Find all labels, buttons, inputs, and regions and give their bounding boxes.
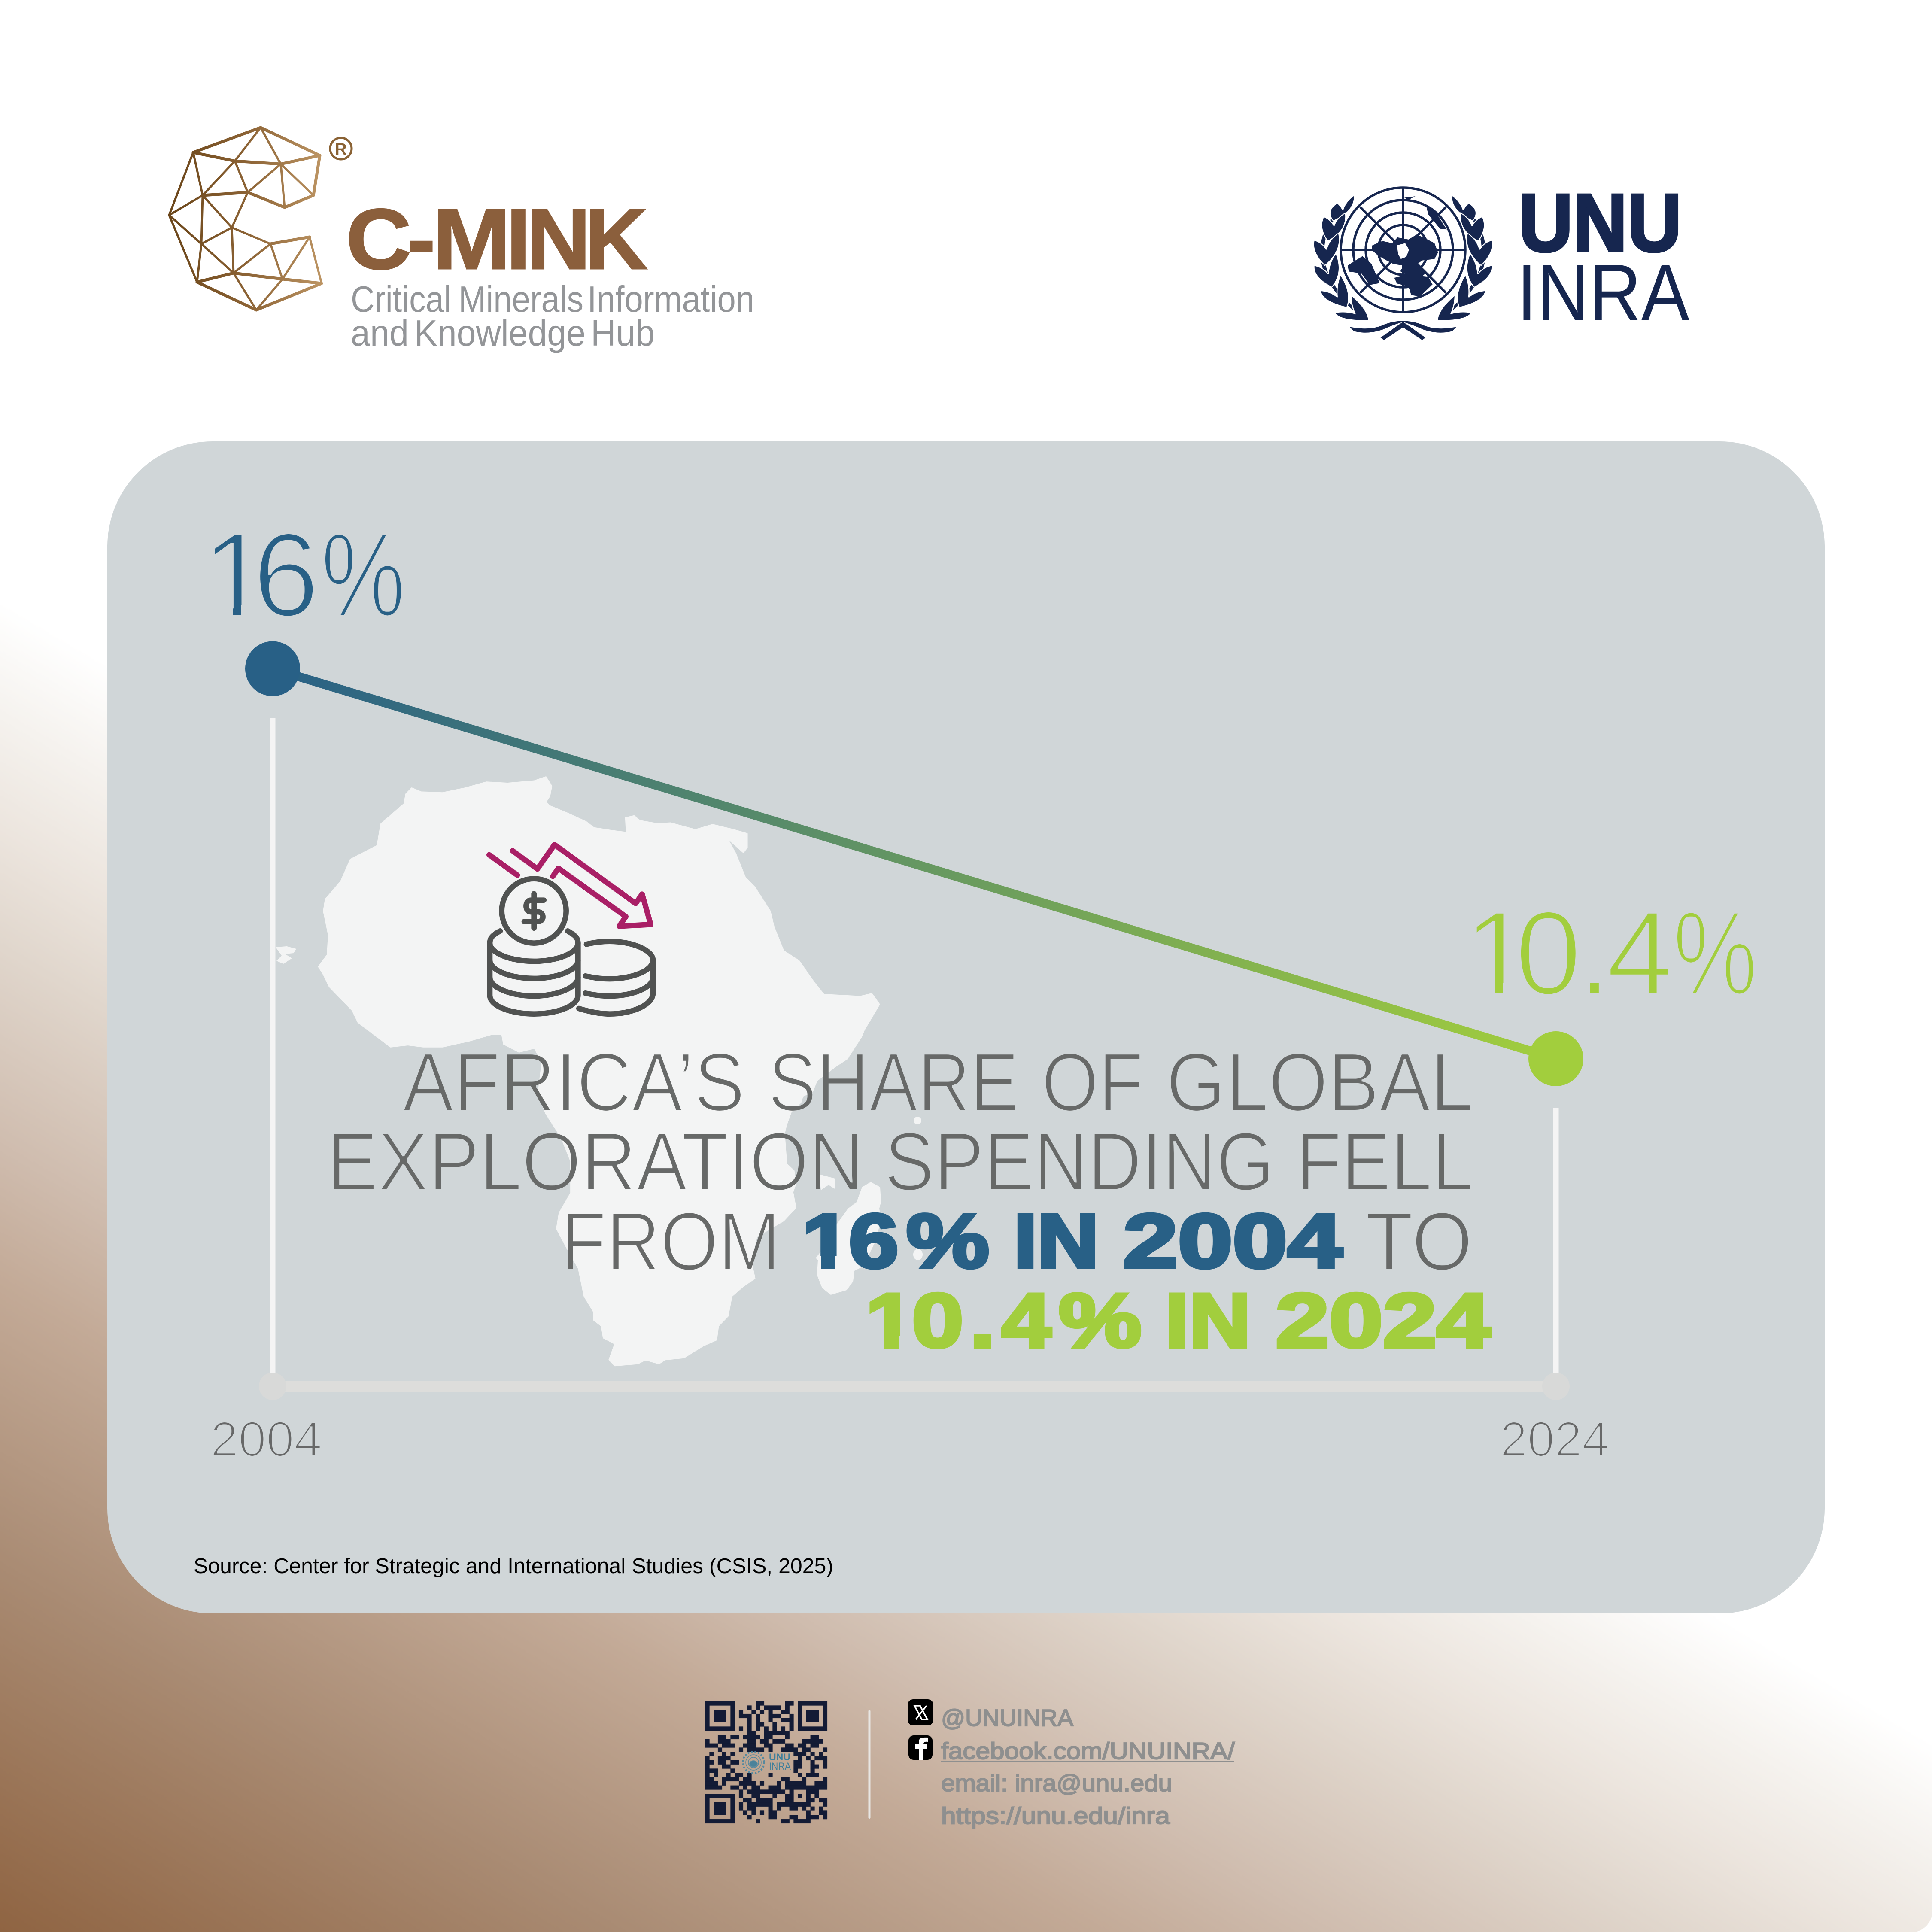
value label: 10.4%	[1477, 912, 1753, 994]
tagline: Hub	[591, 313, 655, 354]
contact details	[941, 1704, 1235, 1829]
data point: 2024	[1528, 1031, 1583, 1086]
wordmark: C-MINK: N	[526, 191, 591, 287]
axis: left end marker	[259, 1373, 286, 1400]
tagline	[351, 279, 754, 354]
headline line 4: 10.4% in 2024: 4	[1002, 1278, 1051, 1363]
contact: website: https://unu.edu/inra	[941, 1802, 1170, 1829]
value label: 16%: %	[321, 508, 406, 641]
chart: declining trend line	[273, 669, 1556, 1059]
headline line 2: EXPLORATION	[327, 1115, 864, 1208]
QR centre logo: INRA: INRA	[769, 1761, 791, 1772]
data point: 2004	[245, 641, 300, 696]
headline line 3: 16% in 2004: %	[906, 1198, 989, 1284]
coins	[490, 879, 653, 1014]
value label: 16%: 6	[253, 508, 319, 641]
tagline: and	[351, 313, 409, 354]
icon: X	[908, 1699, 933, 1725]
headline line 2: FELL	[1296, 1115, 1473, 1208]
tagline: Critical	[351, 279, 451, 320]
headline line 4: 10.4% in 2024: 1	[866, 1278, 914, 1363]
logo: UNU-INRA	[1314, 177, 1689, 340]
headline line 3: 16% in 2004: 2004	[1123, 1198, 1342, 1284]
icon: falling coins	[489, 844, 653, 1014]
headline line 3: 16% in 2004: IN	[1014, 1198, 1099, 1284]
wordmark: INRA: INRA	[1517, 248, 1689, 337]
tagline: Knowledge	[414, 313, 586, 354]
contact: Facebook: facebook.com/UNUINRA/	[941, 1738, 1235, 1764]
source note: Source: Center for Strategic and International Studies (CSIS, 2025)	[194, 1555, 833, 1578]
year label: 2024: 2024	[1500, 1411, 1609, 1467]
axis: horizontal baseline	[279, 1381, 1546, 1392]
registered trademark mark	[330, 138, 352, 159]
headline line 3: 16% in 2004: 6	[849, 1198, 899, 1284]
headline line 1: GLOBAL	[1166, 1036, 1473, 1128]
contact: X handle: @UNUINRA	[941, 1704, 1073, 1731]
icon: C-MINK crystal mesh	[169, 128, 322, 310]
panel: chart card	[107, 441, 1825, 1613]
headline line 4: 10.4% in 2024: .	[969, 1278, 996, 1363]
wordmark: C-MINK: C	[346, 191, 411, 287]
QR modules	[705, 1701, 827, 1823]
value label: 10.4%: .	[1578, 886, 1611, 1020]
headline line 2: SPENDING	[884, 1115, 1274, 1208]
value label: 16%: 1	[202, 508, 269, 641]
headline line 4: 10.4% in 2024: IN	[1165, 1278, 1251, 1363]
tagline: Information	[587, 279, 754, 320]
headline line 3: from: FROM	[561, 1195, 781, 1288]
headline line 4: 10.4% in 2024: %	[1059, 1278, 1142, 1363]
headline	[334, 1054, 1492, 1349]
value label: 10.4%: 4	[1607, 886, 1673, 1020]
contact: Facebook underline	[941, 1761, 1234, 1762]
value label: 10.4%: 1	[1464, 886, 1531, 1020]
laurel branches	[1314, 195, 1492, 340]
continents	[1348, 196, 1447, 297]
axis: left vertical guide	[270, 718, 276, 1375]
QR code	[705, 1701, 827, 1823]
down arrow	[489, 844, 651, 926]
year label: 2004: 2004	[210, 1411, 322, 1467]
wordmark: C-MINK: -	[407, 191, 435, 287]
wordmark: C-MINK: M	[432, 191, 511, 287]
headline line 3: to: TO	[1365, 1195, 1473, 1288]
headline line 4: 10.4% in 2024	[866, 1278, 1490, 1363]
headline line 4: 10.4% in 2024: 2024	[1276, 1278, 1490, 1363]
QR centre logo emblem	[743, 1752, 764, 1773]
tagline: Minerals	[459, 279, 583, 320]
globe grid	[1341, 188, 1465, 312]
headline line 1: AFRICA’S	[403, 1036, 745, 1128]
map: Africa silhouette	[276, 777, 923, 1366]
headline line 3: 16% in 2004: 1	[802, 1198, 851, 1284]
value label: 16%	[215, 534, 401, 616]
registered trademark mark: R	[335, 140, 347, 158]
contact: email: email: inra@unu.edu	[941, 1770, 1172, 1796]
value label: 10.4%: 0	[1515, 886, 1582, 1020]
icon: Facebook	[908, 1735, 933, 1760]
axis: right vertical guide	[1553, 1108, 1558, 1375]
headline line 1: OF	[1042, 1036, 1143, 1128]
headline line 1: SHARE	[768, 1036, 1019, 1128]
headline line 3: 16% in 2004	[806, 1212, 1344, 1270]
footer divider	[868, 1710, 871, 1819]
headline line 4: 10.4% in 2024: 0	[912, 1278, 963, 1363]
icon: UN emblem	[1314, 188, 1492, 340]
wordmark: C-MINK: K	[585, 191, 647, 287]
value label: 10.4%: %	[1673, 886, 1758, 1020]
logo: C-MINK	[169, 128, 754, 354]
axis: right end marker	[1542, 1373, 1570, 1400]
wordmark: UNU: UNU	[1519, 177, 1682, 269]
QR centre logo: UNU: UNU	[769, 1752, 790, 1762]
wordmark: C-MINK: I	[506, 191, 531, 287]
